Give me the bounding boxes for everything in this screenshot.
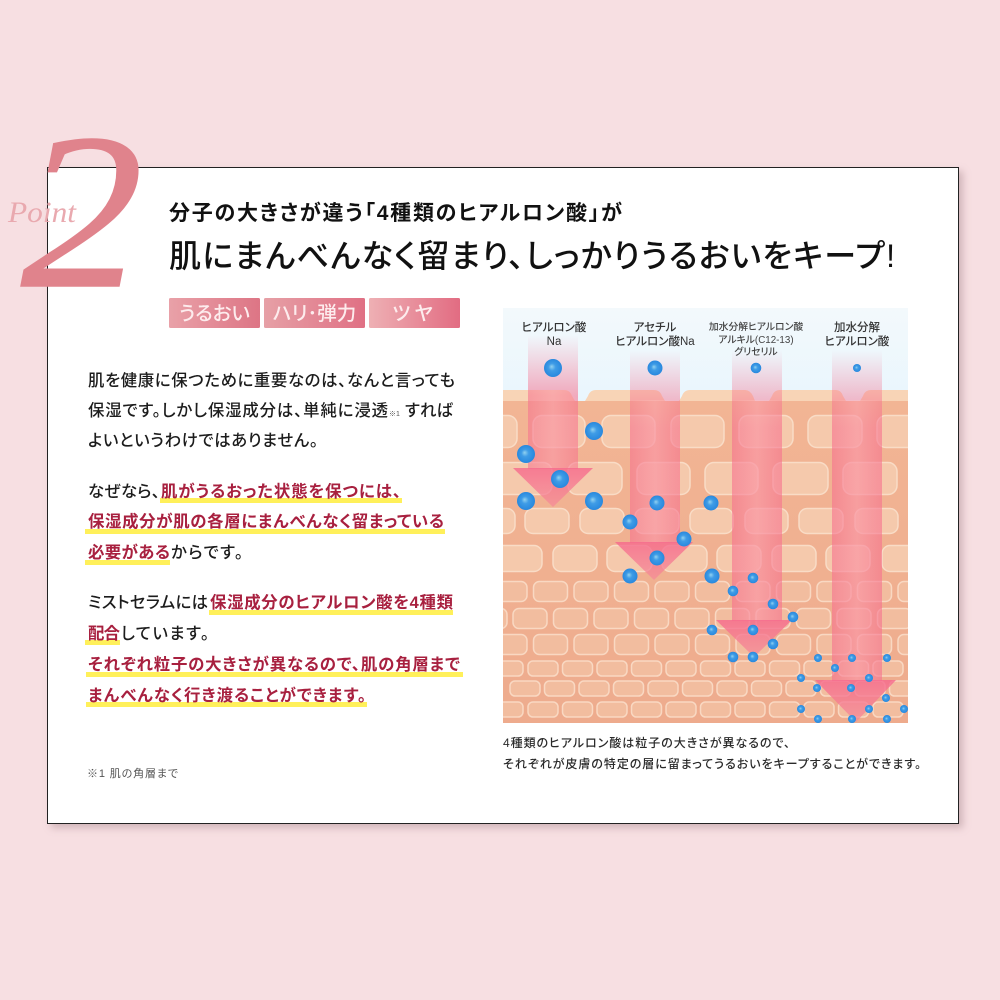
skin cell bricks (490, 416, 922, 572)
body paragraph 3 with highlights: まんべんなく行き渡ることができます。 (88, 686, 366, 705)
diagram caption: それぞれが皮膚の特定の層に留まってうるおいをキープすることができます。 (503, 756, 921, 771)
tags (169, 298, 460, 328)
chart: skin layer diagram (503, 308, 908, 723)
molecules: acetyl hyaluronate Na (622, 360, 720, 584)
body paragraph 1: すれば (405, 402, 453, 420)
diagram caption: 4種類のヒアルロン酸は粒子の大きさが異なるので、 (503, 735, 790, 750)
skin surface bumps (503, 390, 908, 401)
column label 1: ヒアルロン酸 (522, 320, 587, 334)
column label 4: 加水分解 (834, 320, 880, 334)
body paragraph 3 with highlights: それぞれ粒子の大きさが異なるので、肌の角層まで (88, 655, 460, 674)
heading line 1: 分子の大きさが違う「4種類のヒアルロン酸」が (169, 201, 622, 225)
body paragraph 2 with highlights: からです。 (171, 544, 243, 562)
body paragraph 2 with highlights (85, 482, 445, 565)
tag: ツヤ: ツヤ (392, 303, 437, 325)
molecules: hyaluronate Na (largest) (517, 359, 603, 510)
body paragraph 2 with highlights: 必要がある (88, 543, 170, 562)
body paragraph 2 with highlights: 保湿成分が肌の各層にまんべんなく留まっている (88, 512, 444, 531)
body paragraph 3 with highlights: 保湿成分のヒアルロン酸を4種類 (210, 593, 454, 612)
arrow 2 (615, 350, 693, 580)
column label 3: アルキル(C12-13) (718, 334, 794, 346)
label: Point: Point (7, 196, 77, 229)
tag: ハリ・弾力: ハリ･弾力 (273, 303, 356, 325)
tag: うるおい (169, 298, 260, 328)
column label 2 (615, 321, 695, 348)
body paragraph 1 (88, 372, 455, 450)
column label 3 (709, 320, 803, 358)
body paragraph 3 with highlights: しています。 (121, 625, 209, 643)
column label 4: ヒアルロン酸 (825, 334, 890, 348)
column label 4 (826, 321, 889, 346)
arrow 4 (815, 350, 896, 722)
sky area (503, 308, 908, 401)
tag: ツヤ (369, 298, 460, 328)
skin body (503, 401, 908, 723)
arrow 3 (716, 350, 792, 657)
body paragraph 3 with highlights: ミストセラムには (88, 594, 208, 612)
arrow 1 (513, 335, 593, 507)
body paragraph 1: よいというわけではありません。 (88, 432, 318, 450)
numeral 2: 2 (21, 89, 143, 335)
body paragraph 1: 肌を健康に保つために重要なのは、なんと言っても (88, 372, 455, 390)
body paragraph 3 with highlights: 配合 (88, 625, 121, 643)
diagram caption (503, 735, 921, 771)
molecules: hydrolyzed alkyl glyceryl (707, 363, 798, 662)
column label 2: ヒアルロン酸Na (615, 334, 695, 348)
column label 1 (523, 321, 586, 345)
body paragraph 2 with highlights: 肌がうるおった状態を保つには、 (161, 482, 401, 501)
body paragraph 2 with highlights: なぜなら、 (88, 483, 160, 501)
body paragraph 1: 保湿です。しかし保湿成分は、単純に浸透 (88, 402, 388, 420)
body paragraph 1: ※1 (389, 410, 400, 418)
column label 3: グリセリル (734, 345, 778, 358)
tag: うるおい: うるおい (179, 303, 250, 325)
tag: ハリ・弾力 (264, 298, 365, 328)
heading line 2: 肌にまんべんなく留まり、しっかりうるおいをキープ! (169, 238, 895, 274)
panel: white card (48, 168, 958, 824)
column label 1: Na (547, 336, 562, 348)
infographic canvas (8, 138, 966, 832)
body paragraph 3 with highlights (85, 593, 463, 707)
column label 2: アセチル (634, 321, 677, 334)
column label 3: 加水分解ヒアルロン酸 (709, 320, 803, 333)
molecules: hydrolyzed hyaluronic acid (smallest) (797, 364, 908, 723)
footnote: ※1 肌の角層まで (87, 767, 178, 780)
